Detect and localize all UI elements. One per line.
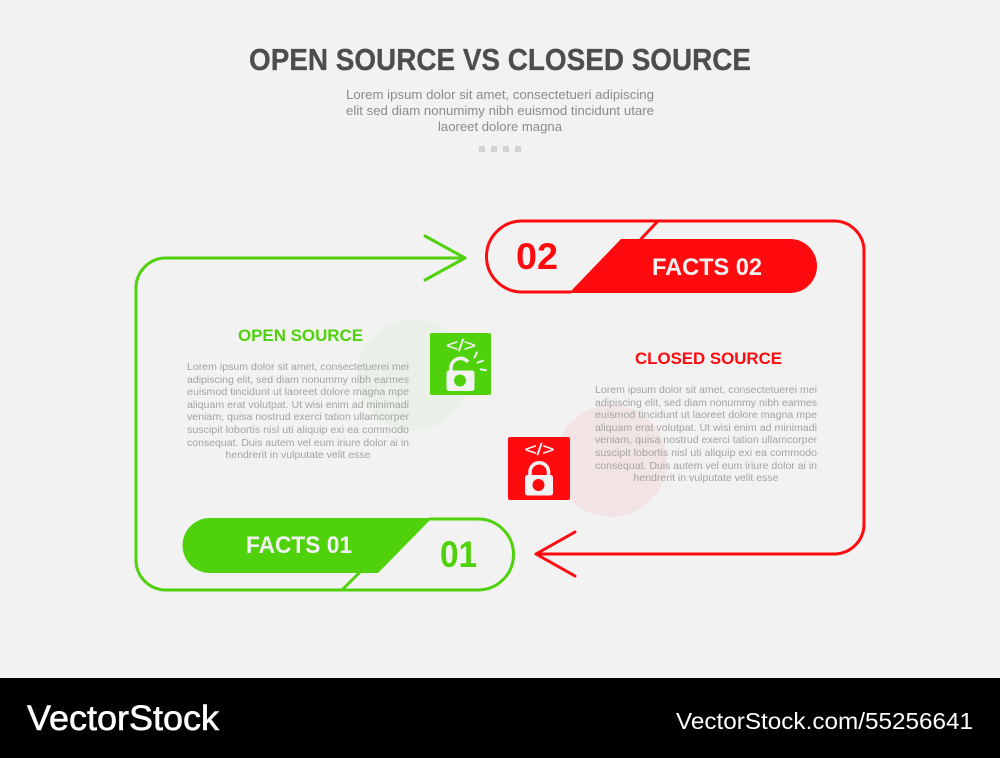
- text block: closed source: adipiscing elit, sed diam nonummy nibh earmes: [595, 397, 817, 409]
- background circle: closed source: [555, 405, 667, 517]
- footer bar: [0, 678, 1000, 758]
- number 01: 01: [440, 534, 477, 575]
- text block: open source: consequat. Duis autem vel eum iriure dolor ai in: [187, 437, 409, 449]
- banner: facts 01: [182, 518, 432, 573]
- title separator dots: [479, 146, 521, 152]
- text block: open source: aliquam erat volutpat. Ut wisi enim ad minimadi: [187, 399, 409, 411]
- text block: closed source: aliquam erat volutpat. Ut wisi enim ad minimadi: [595, 422, 817, 434]
- panel: closed source flow outline with arrow: [486, 221, 864, 576]
- text block: closed source: euismod tincidunt ut laoreet dolore magna mpe: [595, 409, 817, 421]
- text block: closed source: hendrerit in vulputate velit esse: [634, 472, 779, 484]
- text block: open source: suscipit lobortis nisl uti aliquip exi ea commodo: [187, 424, 409, 436]
- heading: open source: OPEN SOURCE: [238, 326, 363, 345]
- icon: open padlock with code: </>: [446, 336, 476, 355]
- subtitle text block: Lorem ipsum dolor sit amet, consectetueri adipiscing: [346, 87, 654, 102]
- panel: open source flow outline with arrow: [136, 236, 514, 590]
- text block: closed source: consequat. Duis autem vel eum iriure dolor ai in: [595, 460, 817, 472]
- text block: open source: veniam, quisa nostrud exerci tation ullamcorper: [187, 411, 409, 423]
- text block: closed source: veniam, quisa nostrud exerci tation ullamcorper: [595, 434, 817, 446]
- icon: open padlock with code: [430, 333, 491, 395]
- subtitle text block: [346, 87, 654, 134]
- icon: closed padlock with code: [508, 437, 570, 500]
- banner: facts 02: FACTS 02: [652, 254, 762, 281]
- footer logo: VectorStock: VectorStock: [27, 699, 220, 738]
- banner: facts 01: FACTS 01: [246, 532, 352, 559]
- background circle: open source: [357, 319, 469, 431]
- icon: closed padlock with code: </>: [524, 440, 555, 459]
- text block: closed source: [595, 384, 817, 484]
- text block: closed source: Lorem ipsum dolor sit amet, consectetuerei mei: [595, 384, 817, 396]
- title: OPEN SOURCE VS CLOSED SOURCE: [249, 42, 751, 77]
- subtitle text block: laoreet dolore magna: [438, 119, 563, 134]
- text block: closed source: suscipit lobortis nisl uti aliquip exi ea commodo: [595, 447, 817, 459]
- subtitle text block: elit sed diam nonumimy nibh euismod tincidunt utare: [346, 103, 654, 118]
- heading: closed source: CLOSED SOURCE: [635, 349, 782, 368]
- text block: open source: adipiscing elit, sed diam nonummy nibh earmes: [187, 374, 409, 386]
- footer image reference: VectorStock.com/55256641: [676, 708, 973, 734]
- number 02: 02: [516, 236, 558, 277]
- text block: open source: euismod tincidunt ut laoreet dolore magna mpe: [187, 386, 409, 398]
- banner: facts 02: [569, 239, 817, 293]
- text block: open source: hendrerit in vulputate velit esse: [226, 449, 371, 461]
- text block: open source: [187, 361, 409, 461]
- text block: open source: Lorem ipsum dolor sit amet, consectetuerei mei: [187, 361, 409, 373]
